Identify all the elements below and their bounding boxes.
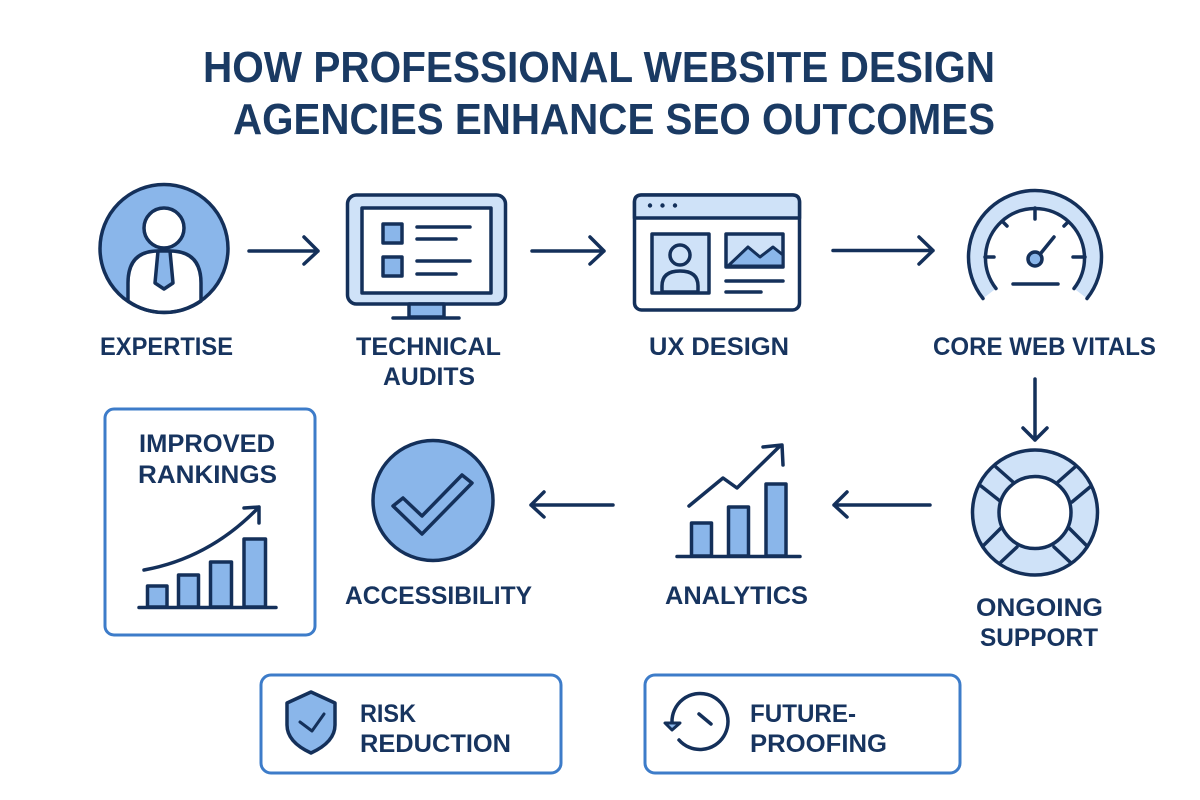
panel: improved rankings: IMPROVED xyxy=(139,430,275,458)
panel: improved rankings xyxy=(105,409,315,635)
label: technical audits xyxy=(356,333,501,391)
icon: technical audit monitor xyxy=(348,195,506,318)
icon: core web vitals gauge xyxy=(969,191,1102,298)
arrow 3 xyxy=(833,237,933,264)
panel: risk reduction xyxy=(261,675,561,773)
label: risk reduction: RISK xyxy=(360,700,416,728)
icon: expertise person xyxy=(100,184,228,312)
arrow 5 xyxy=(834,492,930,517)
label: core web vitals: CORE WEB VITALS xyxy=(933,333,1156,361)
label: future-proofing xyxy=(750,700,887,758)
label: technical audits: AUDITS xyxy=(383,363,475,391)
icon: accessibility check xyxy=(373,440,493,560)
label: risk reduction: REDUCTION xyxy=(360,730,511,758)
icon: ongoing support lifebuoy xyxy=(972,450,1098,575)
label: ongoing support xyxy=(976,594,1103,652)
arrow 2 xyxy=(532,237,604,264)
chart: rankings bars xyxy=(139,507,276,608)
label: expertise: EXPERTISE xyxy=(100,333,233,361)
panel: improved rankings: RANKINGS xyxy=(138,461,277,489)
icon: analytics chart xyxy=(677,445,800,556)
icon: clock with arrow xyxy=(665,693,728,749)
title: AGENCIES ENHANCE SEO OUTCOMES xyxy=(233,96,995,144)
label: future-proofing: FUTURE- xyxy=(750,700,856,728)
icon: UX browser window xyxy=(634,195,800,310)
title: HOW PROFESSIONAL WEBSITE DESIGN xyxy=(203,44,995,92)
label: accessibility: ACCESSIBILITY xyxy=(345,582,532,610)
label: analytics: ANALYTICS xyxy=(665,582,808,610)
arrow 6 xyxy=(531,492,613,517)
arrow 1 xyxy=(249,237,318,264)
label: risk reduction xyxy=(360,700,511,758)
label: ongoing support: SUPPORT xyxy=(980,624,1098,652)
panel: future-proofing xyxy=(645,675,960,773)
label: ongoing support: ONGOING xyxy=(976,594,1103,622)
label: future-proofing: PROOFING xyxy=(750,730,887,758)
title xyxy=(203,44,995,144)
arrow 4 xyxy=(1023,379,1047,440)
label: technical audits: TECHNICAL xyxy=(356,333,501,361)
label: UX design: UX DESIGN xyxy=(649,333,789,361)
icon: shield xyxy=(287,692,335,753)
